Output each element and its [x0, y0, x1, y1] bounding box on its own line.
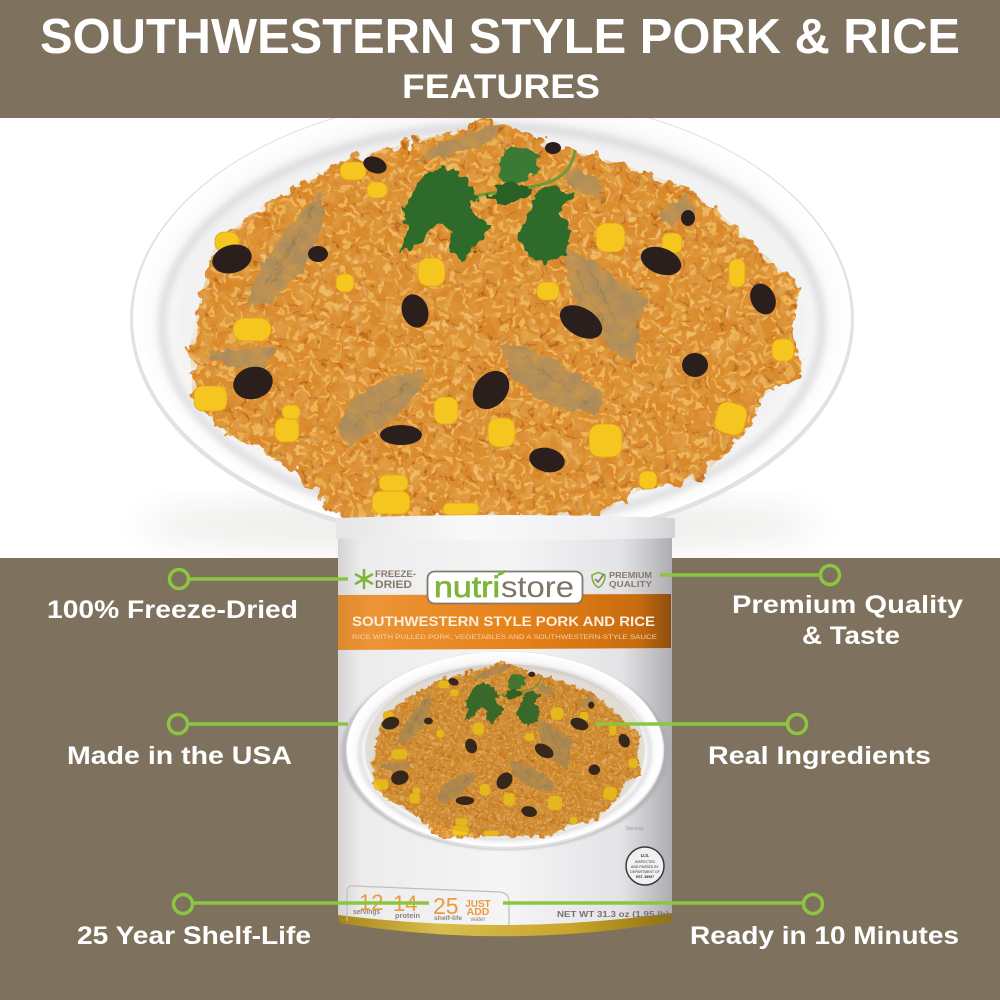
- USDA inspection seal: DEPARTMENT OF: [630, 870, 660, 874]
- USDA inspection seal: AND PASSED BY: [631, 865, 660, 869]
- can photo: dish: [341, 651, 669, 850]
- stats box: protein: [395, 913, 420, 920]
- callout: 100% freeze-dried: [47, 570, 348, 624]
- callout: 100% freeze-dried: 100% Freeze-Dried: [47, 596, 298, 624]
- callout: ready in 10 minutes: Ready in 10 Minutes: [690, 922, 959, 950]
- stats box: ADD: [467, 906, 490, 918]
- can product name: SOUTHWESTERN STYLE PORK AND RICE: [352, 614, 655, 629]
- freeze-dried badge: FREEZE-: [375, 569, 416, 579]
- stats box: servings: [353, 909, 380, 916]
- can lid: [336, 515, 675, 540]
- callout: made in the USA: [67, 714, 348, 770]
- can body: [338, 535, 672, 930]
- freeze-dried badge: DRIED: [375, 579, 412, 591]
- product can: [336, 515, 675, 936]
- stats box: water: [470, 917, 485, 923]
- callout: premium quality and taste: [660, 566, 963, 650]
- nutristore logo: nutri: [434, 571, 500, 604]
- callout: premium quality and taste: Premium Quality: [732, 591, 963, 619]
- USDA inspection seal: U.S.: [641, 853, 649, 858]
- stats box: 12: [359, 890, 383, 915]
- callout: real ingredients: Real Ingredients: [708, 742, 931, 770]
- orange label band: [338, 594, 671, 650]
- lower features panel: [0, 558, 1000, 1000]
- USDA inspection seal: INSPECTED: [635, 860, 655, 864]
- callout: ready in 10 minutes: [503, 894, 959, 950]
- photo: plate of pork and rice: [130, 95, 854, 553]
- can gold base rim: [338, 913, 672, 936]
- nutristore logo: store: [501, 571, 574, 604]
- callout: real ingredients: [595, 714, 931, 770]
- serving suggestion note: Serving: [626, 826, 643, 832]
- freeze-dried badge: [356, 569, 416, 591]
- icon: shield check: [592, 572, 605, 588]
- callout: made in the USA: Made in the USA: [67, 742, 292, 770]
- premium quality badge: [592, 570, 652, 589]
- title: SOUTHWESTERN STYLE PORK & RICE: [40, 10, 960, 64]
- icon: snowflake: [356, 570, 372, 588]
- premium quality badge: PREMIUM: [609, 570, 652, 580]
- stats box: [347, 886, 509, 925]
- stats box: JUST: [465, 899, 491, 910]
- stats box: 25: [433, 893, 459, 919]
- USDA inspection seal: [626, 847, 664, 885]
- net weight: NET WT 31.3 oz (1.95 lb): [557, 909, 669, 919]
- stats box: 14: [393, 891, 417, 916]
- stats box: shelf-life: [434, 915, 462, 922]
- can product description: RICE WITH PULLED PORK, VEGETABLES AND A SOUTHWESTERN-STYLE SAUCE: [352, 634, 658, 641]
- callout: 25 year shelf-life: 25 Year Shelf-Life: [77, 922, 311, 950]
- USDA inspection seal: EST. 38997: [636, 875, 654, 879]
- premium quality badge: QUALITY: [609, 579, 652, 589]
- nutristore logo: [428, 570, 582, 604]
- callout: 25 year shelf-life: [77, 894, 429, 950]
- subtitle: FEATURES: [402, 68, 600, 106]
- header band: [0, 0, 1000, 118]
- callout: premium quality and taste: & Taste: [802, 622, 900, 650]
